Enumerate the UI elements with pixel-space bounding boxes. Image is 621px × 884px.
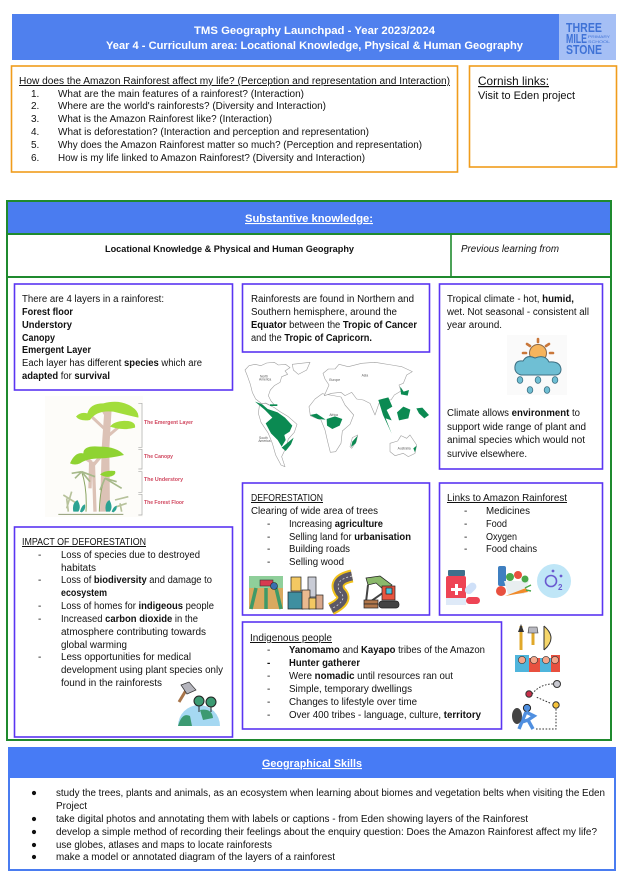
school logo: STONE (566, 42, 602, 57)
panel: impact of deforestation: Loss of biodiversity and damage to (61, 575, 212, 586)
diagram: rainforest layers tree: The Canopy (144, 454, 173, 460)
icon: oxygen (537, 564, 571, 598)
panel: where rainforests are: Southern hemisphere, around the (251, 307, 397, 318)
icon: oxygen: 2 (558, 583, 563, 592)
world map of rainforests: Asia (362, 374, 368, 378)
panel: links to Amazon Rainforest: Food (486, 519, 507, 530)
enquiry question list: What are the main features of a rainforest? (Interaction) (58, 89, 304, 100)
panel: enquiry questions (12, 66, 458, 172)
substantive knowledge heading: Substantive knowledge: (245, 213, 373, 225)
panel: links to Amazon Rainforest: Medicines (486, 506, 530, 517)
panel: tropical climate: animal species which would not (447, 435, 585, 446)
panel: deforestation: - (267, 544, 270, 555)
skills list (32, 788, 605, 863)
panel: deforestation: Clearing of wide area of trees (251, 506, 378, 517)
panel: deforestation: DEFORESTATION (251, 493, 323, 504)
panel: links to Amazon Rainforest: Oxygen (486, 532, 517, 543)
panel: rainforest layers: adapted for survival (22, 371, 110, 382)
enquiry question list: 2. (31, 101, 39, 112)
panel: rainforest layers: There are 4 layers in a rainforest: (22, 294, 164, 305)
enquiry question list: 6. (31, 153, 39, 164)
panel: deforestation: - (267, 519, 270, 530)
world map of rainforests: South (259, 436, 268, 440)
panel: indigenous people: Indigenous people (250, 633, 332, 644)
panel: links to Amazon Rainforest: Food chains (486, 544, 537, 555)
icon: tribal people and weapons (515, 624, 560, 672)
enquiry question list: 5. (31, 140, 39, 151)
panel: rainforest layers: Understory (22, 320, 72, 331)
panel: impact of deforestation: Less opportunities for medical (61, 652, 191, 663)
title: Year 4 - Curriculum area: Locational Knowledge, Physical & Human Geography (106, 40, 524, 52)
panel: tropical climate: year around. (447, 320, 502, 331)
enquiry heading: How does the Amazon Rainforest affect my life? (Perception and representation and Interaction) (19, 76, 450, 87)
world map of rainforests: America (258, 439, 271, 443)
panel: impact of deforestation: Loss of species due to destroyed (61, 550, 200, 561)
panel: indigenous people: Simple, temporary dwellings (289, 684, 412, 695)
world map of rainforests: Europe (329, 378, 340, 382)
diagram: rainforest layers tree: The Understory (144, 477, 183, 483)
enquiry question list: What is deforestation? (Interaction and perception and representation) (58, 127, 369, 138)
panel: links to Amazon Rainforest (440, 483, 602, 615)
panel: deforestation: Increasing agriculture (289, 519, 383, 530)
panel: impact of deforestation: found in the rainforests (61, 678, 162, 689)
panel: indigenous people: Changes to lifestyle over time (289, 697, 417, 708)
panel: where rainforests are (242, 284, 430, 352)
panel: where rainforests are: Rainforests are found in Northern and (251, 294, 414, 305)
geographical skills heading: Geographical Skills (262, 758, 362, 770)
panel: impact of deforestation: development using plant species only (61, 665, 223, 676)
panel: deforestation: Selling wood (289, 557, 344, 568)
panel: links to Amazon Rainforest: - (464, 519, 467, 530)
skills list: use globes, atlases and maps to locate rainforests (56, 840, 272, 851)
panel: impact of deforestation: IMPACT OF DEFORESTATION (22, 537, 146, 548)
panel: indigenous people: - (267, 710, 270, 721)
skills list: take digital photos and annotating them with labels or captions - from Eden showing layers of the Rainforest (56, 814, 528, 825)
panel: rainforest layers (14, 284, 232, 390)
panel: links to Amazon Rainforest: - (464, 544, 467, 555)
enquiry question list: 4. (31, 127, 39, 138)
diagram: rainforest layers tree (45, 396, 193, 517)
skills list: Project (56, 801, 87, 812)
panel: tropical climate: Climate allows environment to (447, 408, 580, 419)
world map of rainforests: Australia (398, 446, 411, 450)
school logo (559, 14, 616, 60)
panel: tropical climate: support wide range of plant and (447, 422, 586, 433)
icon: healthy food (496, 566, 531, 596)
panel: tropical climate (440, 284, 602, 469)
panel: deforestation: Building roads (289, 544, 350, 555)
world map of rainforests: North (260, 375, 268, 379)
panel: deforestation: - (267, 557, 270, 568)
enquiry question list: How is my life linked to Amazon Rainforest? (Diversity and Interaction) (58, 153, 365, 164)
enquiry question list (31, 89, 422, 164)
school logo: PRIMARY (588, 34, 610, 39)
skills list: make a model or annotated diagram of the layers of a rainforest (56, 852, 335, 863)
panel: indigenous people: - (267, 658, 270, 669)
diagram: rainforest layers tree: The Emergent Layer (144, 420, 193, 426)
panel: indigenous people: Were nomadic until resources ran out (289, 671, 453, 682)
panel: impact of deforestation: global warming (61, 640, 127, 651)
panel: indigenous people: - (267, 684, 270, 695)
skills list: develop a simple method of recording their feelings about the enquiry question: Does the Amazon Rainforest affect my life? (56, 827, 597, 838)
panel: deforestation: Selling land for urbanisation (289, 532, 411, 543)
panel: impact of deforestation: - (38, 652, 41, 663)
panel: rainforest layers: Each layer has different species which are (22, 358, 202, 369)
panel: geographical skills (8, 747, 616, 870)
panel: impact of deforestation: - (38, 575, 41, 586)
panel: links to Amazon Rainforest: - (464, 506, 467, 517)
panel: impact of deforestation (14, 527, 232, 737)
school logo: SCHOOL (588, 39, 611, 44)
icon: medicine bottle and pills (446, 570, 480, 605)
panel: tropical climate: Tropical climate - hot, humid, (447, 294, 574, 305)
panel: indigenous people: - (267, 671, 270, 682)
world map of rainforests (245, 362, 429, 467)
icon: sun, cloud and rain (507, 335, 567, 395)
panel: indigenous people: Over 400 tribes - language, culture, territory (289, 710, 481, 721)
panel: rainforest layers: Emergent Layer (22, 345, 91, 356)
panel: rainforest layers: Canopy (22, 333, 55, 344)
enquiry question list: 3. (31, 114, 39, 125)
panel: where rainforests are: Equator between the Tropic of Cancer (251, 320, 417, 331)
icon: winding road (331, 576, 352, 609)
panel: impact of deforestation: - (38, 550, 41, 561)
panel: deforestation: - (267, 532, 270, 543)
school logo: THREE (566, 20, 602, 35)
panel: Cornish links: Cornish links: (478, 74, 549, 88)
world map of rainforests: Africa (329, 413, 338, 417)
title (106, 25, 524, 52)
panel: deforestation (242, 483, 430, 615)
icon: city buildings (288, 577, 323, 609)
panel: impact of deforestation: - (38, 614, 41, 625)
panel: links to Amazon Rainforest: Links to Amazon Rainforest (447, 493, 567, 504)
panel: where rainforests are: and the Tropic of Capricorn. (251, 333, 372, 344)
world map of rainforests: America (259, 378, 271, 382)
icon: excavator felling trees (364, 576, 399, 608)
panel: indigenous people: - (267, 697, 270, 708)
icon: nomadic journey (512, 680, 560, 729)
icon: farm tractor (249, 576, 283, 609)
icon: axe and globe (178, 682, 220, 726)
header banner (12, 14, 616, 60)
title: TMS Geography Launchpad - Year 2023/2024 (194, 25, 436, 37)
enquiry question list: 1. (31, 89, 39, 100)
panel: impact of deforestation: habitats (61, 563, 96, 574)
panel: impact of deforestation: atmosphere contributing towards (61, 627, 206, 638)
panel: rainforest layers: Forest floor (22, 307, 73, 318)
panel: indigenous people: Yanomamo and Kayapo tribes of the Amazon (289, 645, 485, 656)
diagram: rainforest layers tree: The Forest Floor (144, 500, 184, 506)
panel: substantive knowledge frame (7, 201, 611, 740)
panel: impact of deforestation: Increased carbon dioxide in the (61, 614, 198, 625)
panel: indigenous people: Hunter gatherer (289, 658, 360, 669)
enquiry question list: What is the Amazon Rainforest like? (Interaction) (58, 114, 272, 125)
geographical skills heading (8, 747, 616, 778)
enquiry question list: Where are the world's rainforests? (Diversity and Interaction) (58, 101, 326, 112)
panel: impact of deforestation: Loss of homes for indigeous people (61, 601, 214, 612)
panel: indigenous people (242, 622, 502, 729)
panel: indigenous people: - (267, 645, 270, 656)
enquiry question list: Why does the Amazon Rainforest matter so much? (Perception and representation) (58, 140, 422, 151)
panel: Cornish links: Visit to Eden project (478, 90, 575, 102)
skills list: study the trees, plants and animals, as an ecosystem when learning about biomes and vegetation belts when visiting the Eden (56, 788, 605, 799)
panel: Cornish links (470, 66, 616, 167)
panel: impact of deforestation: - (38, 601, 41, 612)
curriculum area label: Locational Knowledge & Physical and Human Geography (105, 244, 355, 255)
previous learning label: Previous learning from (461, 244, 559, 255)
panel: tropical climate: wet. Not seasonal - consistent all (446, 307, 589, 318)
panel: tropical climate: survive elsewhere. (447, 449, 527, 460)
school logo: MILE (566, 31, 587, 46)
panel: links to Amazon Rainforest: - (464, 532, 467, 543)
substantive knowledge heading (8, 202, 610, 233)
panel: impact of deforestation: ecosystem (61, 588, 107, 599)
